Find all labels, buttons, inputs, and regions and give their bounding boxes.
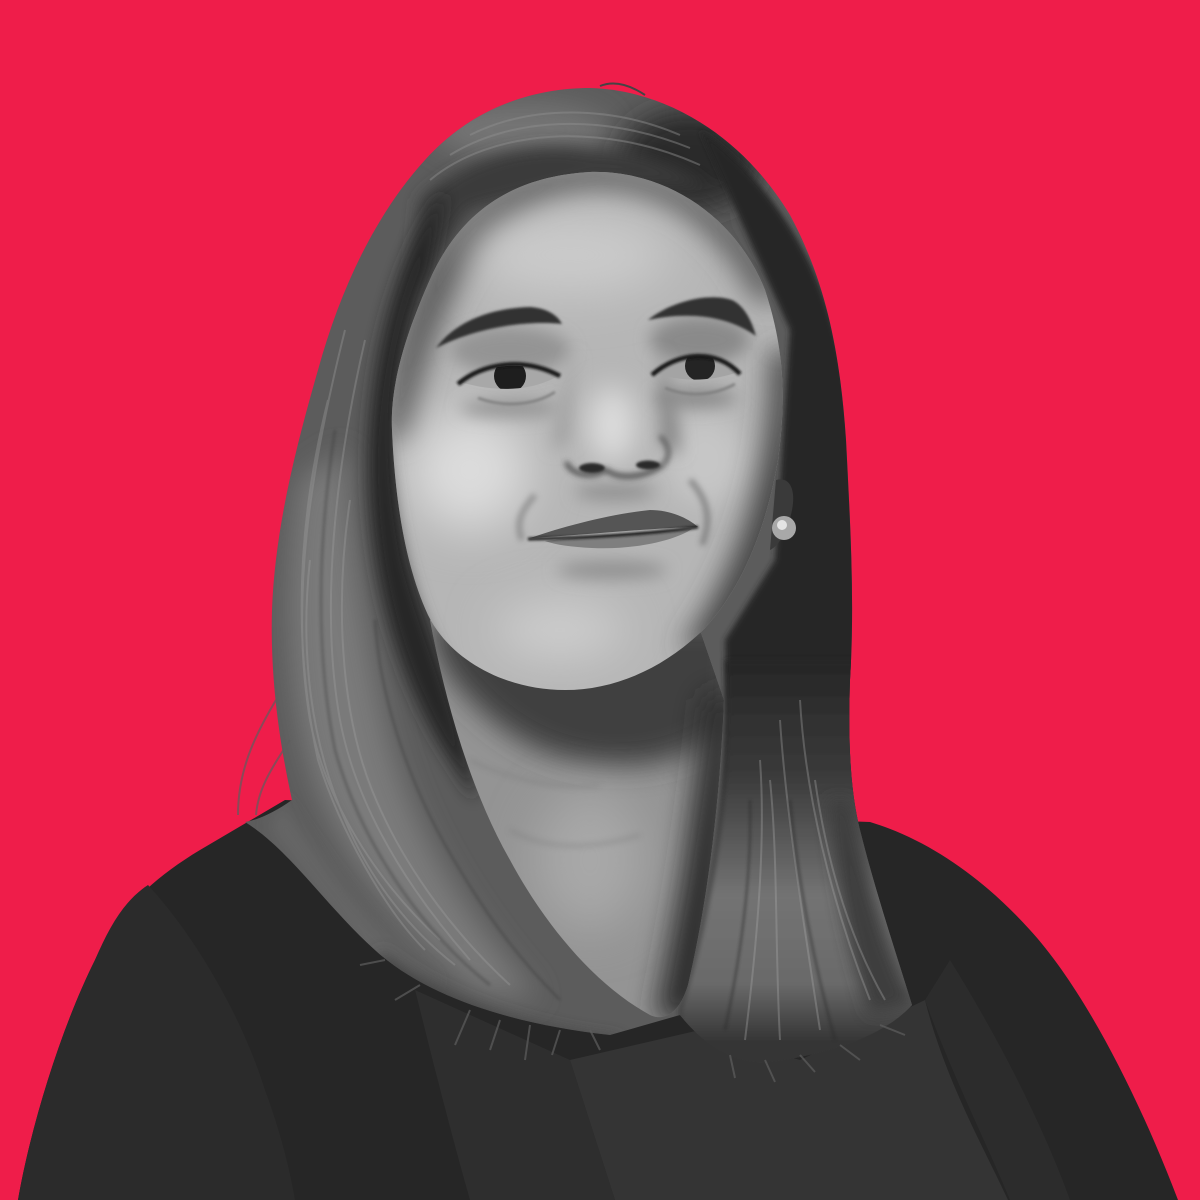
chin light bbox=[495, 602, 625, 658]
left front panel bbox=[415, 990, 615, 1200]
right front panel bbox=[925, 960, 1070, 1200]
dark strands bbox=[321, 430, 560, 1000]
under lip shadow bbox=[557, 561, 667, 579]
eye sockets bbox=[450, 326, 570, 374]
inner shirt bbox=[570, 1000, 1008, 1200]
earring bbox=[770, 479, 796, 550]
shadow under chin bbox=[425, 620, 740, 766]
face bbox=[392, 172, 783, 690]
nose side shadow bbox=[660, 350, 680, 455]
smile creases bbox=[519, 495, 535, 540]
left hair mid-tone bbox=[290, 450, 540, 1000]
shadow next to hair, right bbox=[655, 690, 740, 1020]
eyes bbox=[458, 351, 740, 404]
light strands bbox=[302, 330, 510, 985]
chest highlight bbox=[535, 790, 645, 930]
dark inner left hair next to face bbox=[368, 190, 475, 800]
left sleeve bbox=[18, 885, 295, 1200]
upper lip shadow bbox=[575, 483, 655, 501]
outer right hair shade bbox=[828, 800, 915, 1015]
cheek lights bbox=[410, 410, 530, 530]
crown tones bbox=[430, 102, 610, 158]
eyebrows bbox=[436, 297, 756, 348]
cardigan bbox=[18, 800, 1178, 1200]
lower left hair shade bbox=[379, 951, 603, 1034]
stray and frayed ends bbox=[238, 700, 905, 1082]
left jaw dark bbox=[392, 438, 442, 636]
neck bbox=[430, 620, 724, 1018]
right edge dark bbox=[680, 350, 800, 650]
hairline shadow bbox=[385, 165, 790, 440]
hair bbox=[238, 83, 925, 1082]
mouth bbox=[528, 510, 698, 548]
right hair, dark fading to gray bbox=[680, 130, 920, 1070]
nose bbox=[566, 387, 668, 476]
forehead light bbox=[470, 215, 670, 295]
